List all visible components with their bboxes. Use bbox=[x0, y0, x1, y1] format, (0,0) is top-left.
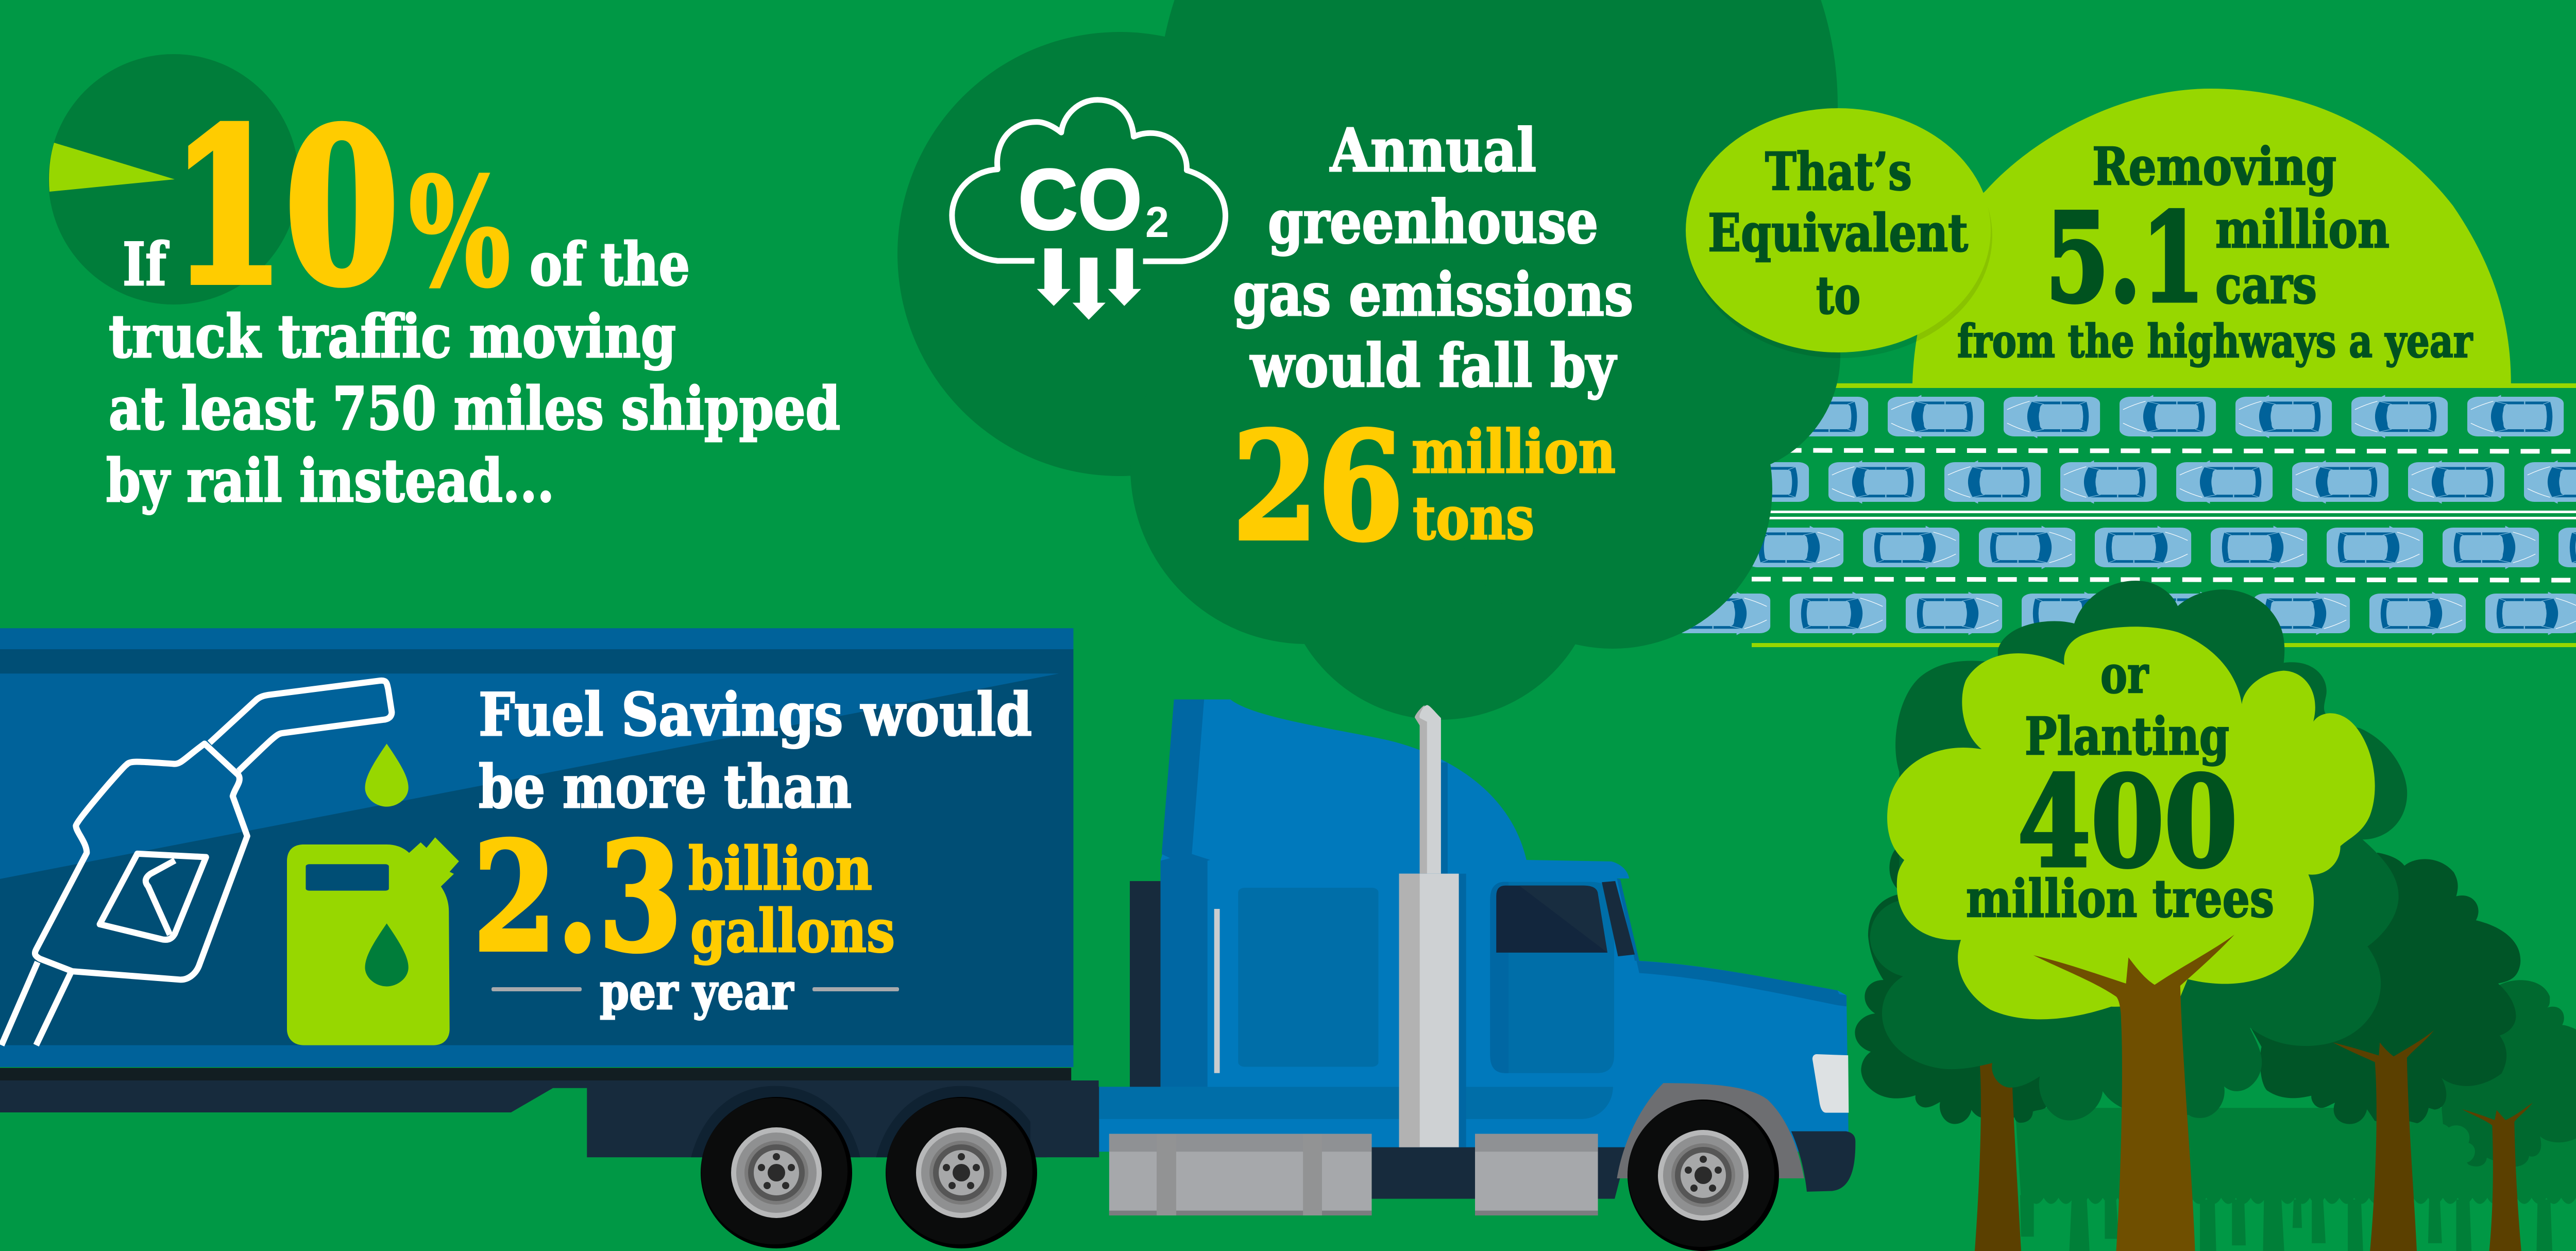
text: fuel savings: Fuel Savings would bbox=[479, 680, 1032, 749]
trees illustration bbox=[1855, 581, 2576, 1251]
text: truck traffic intro: at least 750 miles shipped bbox=[109, 374, 840, 443]
text: annual greenhouse gas emissions: would fall by bbox=[1249, 331, 1617, 401]
text: planting trees: Planting bbox=[2025, 706, 2229, 767]
panel: removing cars dome: Removing bbox=[2092, 136, 2336, 197]
text: planting trees: 400 bbox=[2018, 749, 2238, 895]
icon: CO2 cloud with arrows bbox=[952, 100, 1226, 320]
text: planting trees: million trees bbox=[1966, 868, 2274, 929]
text: fuel savings: billion bbox=[688, 834, 872, 903]
text: truck traffic intro: If bbox=[123, 230, 170, 299]
text: annual greenhouse gas emissions bbox=[1232, 116, 1633, 573]
text: annual greenhouse gas emissions: Annual bbox=[1330, 116, 1536, 185]
text: fuel savings: 2.3 bbox=[473, 810, 682, 985]
text: annual greenhouse gas emissions: tons bbox=[1413, 484, 1534, 553]
icon: fuel can bbox=[287, 837, 459, 1045]
callout: that's equivalent to: That’s bbox=[1765, 141, 1912, 202]
panel: removing cars dome bbox=[1912, 89, 2511, 383]
panel: emissions cloud bbox=[897, 0, 1840, 720]
text: fuel savings: gallons bbox=[690, 897, 895, 966]
text: fuel savings: be more than bbox=[479, 752, 852, 821]
text: fuel savings: per year bbox=[600, 962, 794, 1021]
icon: ten percent pie bbox=[48, 54, 299, 305]
highway with cars bbox=[1674, 383, 2576, 647]
truck trailer bbox=[0, 628, 1099, 1157]
text: annual greenhouse gas emissions: greenhouse bbox=[1268, 188, 1598, 257]
text: fuel savings bbox=[473, 680, 1032, 1021]
panel: removing cars dome: 5.1 bbox=[2045, 187, 2205, 330]
text: truck traffic intro: of the bbox=[530, 230, 690, 299]
truck wheels bbox=[701, 1097, 1779, 1251]
panel: removing cars dome: cars bbox=[2215, 255, 2317, 315]
text: truck traffic intro: by rail instead... bbox=[106, 446, 554, 515]
icon: fuel nozzle bbox=[2, 681, 392, 1045]
icon: fuel drop bbox=[365, 743, 409, 807]
panel: removing cars dome: million bbox=[2215, 199, 2389, 260]
text: truck traffic intro bbox=[106, 83, 840, 515]
truck cab bbox=[1030, 700, 1855, 1215]
callout: that's equivalent to: Equivalent bbox=[1708, 202, 1968, 263]
text: annual greenhouse gas emissions: million bbox=[1412, 417, 1616, 487]
text: annual greenhouse gas emissions: gas emissions bbox=[1233, 260, 1633, 330]
text: truck traffic intro: truck traffic moving bbox=[109, 302, 676, 371]
text: planting trees bbox=[1966, 644, 2274, 929]
icon: CO2 cloud with arrows: 2 bbox=[1145, 198, 1169, 246]
text: planting trees: or bbox=[2100, 644, 2149, 705]
text: truck traffic intro: 10 bbox=[171, 83, 399, 331]
text: annual greenhouse gas emissions: 26 bbox=[1232, 400, 1403, 573]
text: truck traffic intro: % bbox=[409, 145, 511, 320]
callout: that's equivalent to: to bbox=[1816, 265, 1860, 326]
callout: that's equivalent to bbox=[1686, 108, 1992, 358]
icon: CO2 cloud with arrows: CO bbox=[1018, 151, 1142, 248]
